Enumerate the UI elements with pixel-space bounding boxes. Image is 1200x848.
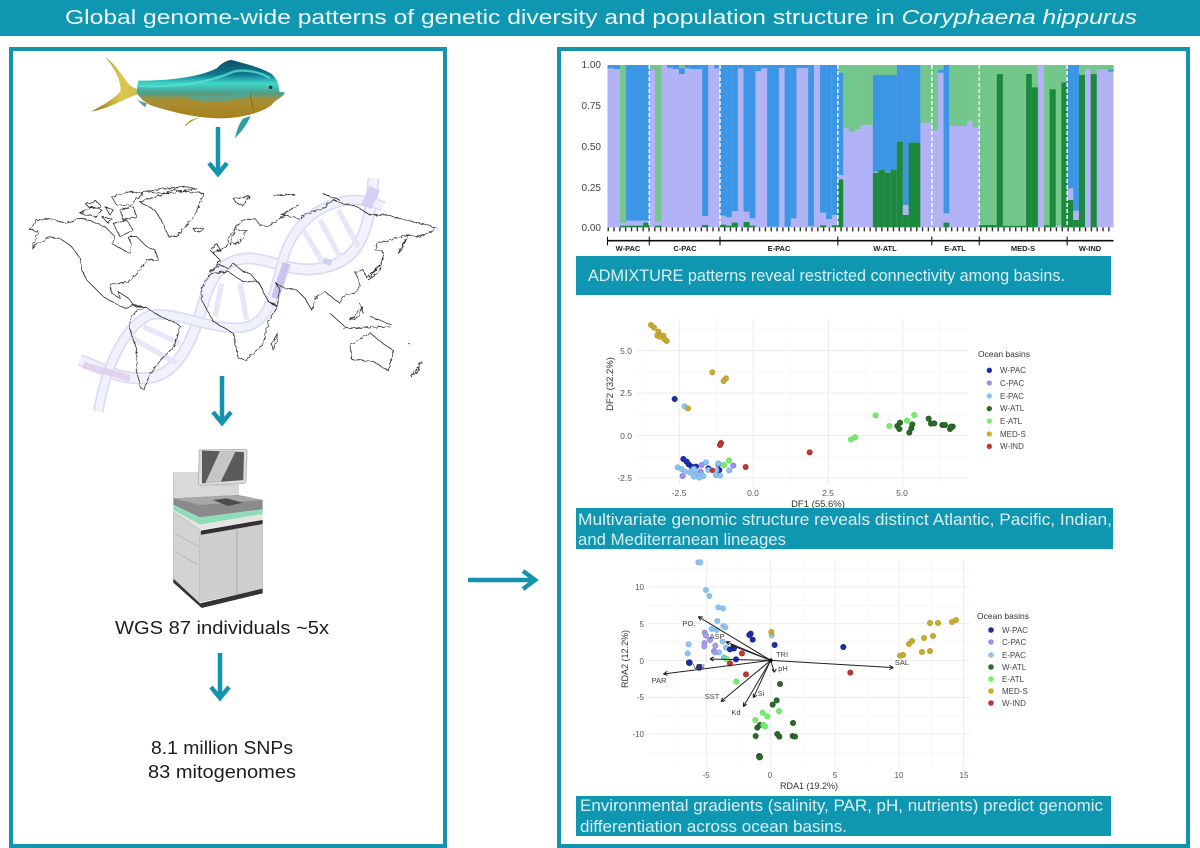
chart: RDA biplot: 0 bbox=[768, 771, 773, 780]
W-PAC points bbox=[686, 631, 846, 670]
scatter axis text bbox=[617, 346, 908, 498]
New Zealand bbox=[408, 343, 422, 376]
biplot axis text bbox=[632, 583, 645, 739]
scatter axis text: 2.5 bbox=[822, 488, 834, 498]
chart: RDA biplot: RDA2 (12.2%) bbox=[620, 630, 630, 688]
caption: multivariate structure: Multivariate genomic structure reveals distinct Atlantic, Pacific, Indian, bbox=[578, 510, 1112, 529]
text: SNP and mitogenome counts: 8.1 million SNPs bbox=[151, 738, 293, 758]
scatter axis text: 0.0 bbox=[747, 488, 759, 498]
y axis labels bbox=[582, 60, 601, 234]
chart: ADMIXTURE stacked bars bbox=[582, 60, 1114, 253]
North America bbox=[30, 218, 158, 308]
Japan and Asia islands bbox=[368, 258, 383, 280]
chart: DAPC scatter plot: W-PAC bbox=[1000, 366, 1026, 375]
chart: RDA biplot: RDA1 (19.2%) bbox=[780, 781, 838, 791]
biplot vector labels: SST bbox=[705, 692, 720, 701]
biplot legend bbox=[988, 626, 1028, 708]
biplot legend: E-ATL bbox=[1002, 675, 1025, 684]
y axis labels: 1.00 bbox=[582, 60, 601, 71]
Australia bbox=[350, 333, 393, 371]
environmental vectors bbox=[663, 617, 893, 707]
W-ATL points bbox=[753, 681, 798, 760]
W-ATL points bbox=[895, 416, 955, 435]
biplot legend: W-IND bbox=[1002, 699, 1026, 708]
y axis labels: 0.50 bbox=[582, 142, 601, 153]
biplot legend: C-PAC bbox=[1002, 638, 1027, 647]
basin labels: W-PAC bbox=[616, 244, 641, 253]
scatter axis text: -2.5 bbox=[617, 473, 632, 483]
basin labels: MED-S bbox=[1011, 244, 1035, 253]
E-PAC points bbox=[675, 404, 732, 480]
basin labels: E-PAC bbox=[768, 244, 791, 253]
text: WGS sample description: WGS 87 individuals ~5x bbox=[115, 618, 329, 638]
scatter axis text: -2.5 bbox=[672, 488, 687, 498]
y axis labels: 0.00 bbox=[582, 223, 601, 234]
chart: RDA biplot: 15 bbox=[960, 771, 969, 780]
W-PAC points bbox=[672, 396, 722, 473]
chart: DAPC scatter plot: MED-S bbox=[1000, 430, 1026, 439]
biplot vector labels: Si bbox=[758, 689, 765, 698]
y axis labels: 0.25 bbox=[582, 183, 601, 194]
arrow: sequencer to results bbox=[211, 653, 229, 698]
C-PAC points bbox=[702, 630, 718, 655]
chart: DAPC scatter plot: DF1 (55.6%) bbox=[791, 499, 845, 510]
biplot vector labels: TRI bbox=[776, 650, 788, 659]
biplot legend: W-ATL bbox=[1002, 663, 1027, 672]
text: SNP and mitogenome counts: 83 mitogenomes bbox=[148, 762, 296, 782]
biplot vector labels: PO. bbox=[683, 619, 695, 628]
chart: DAPC scatter plot: W-ATL bbox=[1000, 404, 1025, 413]
legend dots bbox=[987, 368, 992, 449]
title banner: Global genome-wide patterns of genetic diversity and population structure in Coryphaena hippurus bbox=[65, 7, 1137, 29]
W-IND points bbox=[710, 440, 812, 473]
arrow: workflow to results bbox=[468, 571, 535, 589]
C-PAC points bbox=[680, 462, 736, 479]
Eurasia bbox=[210, 200, 437, 310]
E-ATL points bbox=[724, 656, 782, 729]
caption: ADMIXTURE bbox=[576, 256, 1111, 295]
scatter axis text: 2.5 bbox=[620, 388, 632, 398]
chart: RDA biplot: Ocean basins bbox=[977, 611, 1029, 621]
chart: DAPC scatter plot bbox=[605, 318, 1030, 510]
caption: ADMIXTURE: ADMIXTURE patterns reveal restricted connectivity among basins. bbox=[588, 266, 1065, 285]
panel: results bbox=[559, 49, 1188, 846]
biplot axis text: -5 bbox=[637, 693, 645, 702]
MED-S points bbox=[648, 322, 729, 411]
arrow: fish to map bbox=[209, 127, 227, 174]
biplot vector labels: pH bbox=[778, 664, 788, 673]
biplot axis text: 0 bbox=[640, 657, 645, 666]
arrow: map to sequencer bbox=[213, 376, 231, 423]
caption: environmental gradients: Environmental gradients (salinity, PAR, pH, nutrients) predict genomic bbox=[580, 796, 1103, 815]
chart: RDA biplot bbox=[620, 558, 1029, 791]
text: SNP and mitogenome counts bbox=[148, 738, 296, 782]
chart: DAPC scatter plot: Ocean basins bbox=[978, 349, 1030, 359]
biplot legend: E-PAC bbox=[1002, 651, 1026, 660]
chart: RDA biplot: 5 bbox=[833, 771, 838, 780]
basin labels: W-IND bbox=[1079, 244, 1102, 253]
caption: environmental gradients bbox=[576, 796, 1111, 836]
icon: world map with DNA helix bbox=[30, 178, 437, 412]
biplot axis text: 10 bbox=[635, 583, 645, 592]
biplot vector labels: ASP bbox=[709, 632, 725, 641]
biplot axis text: -10 bbox=[632, 730, 645, 739]
chart: DAPC scatter plot: W-IND bbox=[1000, 442, 1024, 451]
chart: RDA biplot: -5 bbox=[702, 771, 710, 780]
biplot legend: W-PAC bbox=[1002, 626, 1028, 635]
Africa bbox=[202, 272, 277, 360]
basin labels: C-PAC bbox=[673, 244, 697, 253]
caption: environmental gradients: differentiation across ocean basins. bbox=[580, 817, 847, 836]
icon: mahi-mahi fish bbox=[91, 57, 285, 138]
South America bbox=[129, 307, 181, 389]
Greenland bbox=[140, 190, 204, 237]
chart: DAPC scatter plot: E-ATL bbox=[1000, 417, 1023, 426]
E-ATL points bbox=[721, 412, 917, 468]
chart: RDA biplot: 10 bbox=[895, 771, 904, 780]
chart: DAPC scatter plot: E-PAC bbox=[1000, 392, 1024, 401]
DNA helix bbox=[80, 178, 383, 412]
W-IND points bbox=[727, 651, 853, 677]
MED-S points bbox=[769, 617, 959, 658]
scatter axis text: 5.0 bbox=[896, 488, 908, 498]
scatter axis text: 5.0 bbox=[620, 346, 632, 356]
biplot vector labels bbox=[652, 619, 909, 717]
icon: sequencing machine bbox=[173, 449, 263, 608]
chart: DAPC scatter plot: DF2 (32.2%) bbox=[605, 357, 616, 411]
title banner bbox=[0, 0, 1200, 36]
basin labels: W-ATL bbox=[873, 244, 897, 253]
panel: workflow bbox=[11, 49, 445, 846]
biplot vector labels: VEL bbox=[693, 662, 707, 671]
basin labels bbox=[616, 244, 1102, 253]
biplot legend: MED-S bbox=[1002, 687, 1028, 696]
E-PAC points bbox=[685, 560, 774, 660]
biplot vector labels: PAR bbox=[652, 676, 667, 685]
caption: multivariate structure bbox=[576, 508, 1113, 549]
scatter axis text: 0.0 bbox=[620, 431, 632, 441]
biplot axis text: 5 bbox=[640, 620, 645, 629]
caption: multivariate structure: and Mediterranean lineages bbox=[578, 530, 786, 549]
y axis labels: 0.75 bbox=[582, 101, 601, 112]
basin labels: E-ATL bbox=[944, 244, 966, 253]
Arctic islands bbox=[80, 187, 204, 237]
biplot vector labels: Kd bbox=[731, 708, 741, 717]
chart: DAPC scatter plot: C-PAC bbox=[1000, 379, 1025, 388]
biplot vector labels: SAL bbox=[895, 658, 909, 667]
